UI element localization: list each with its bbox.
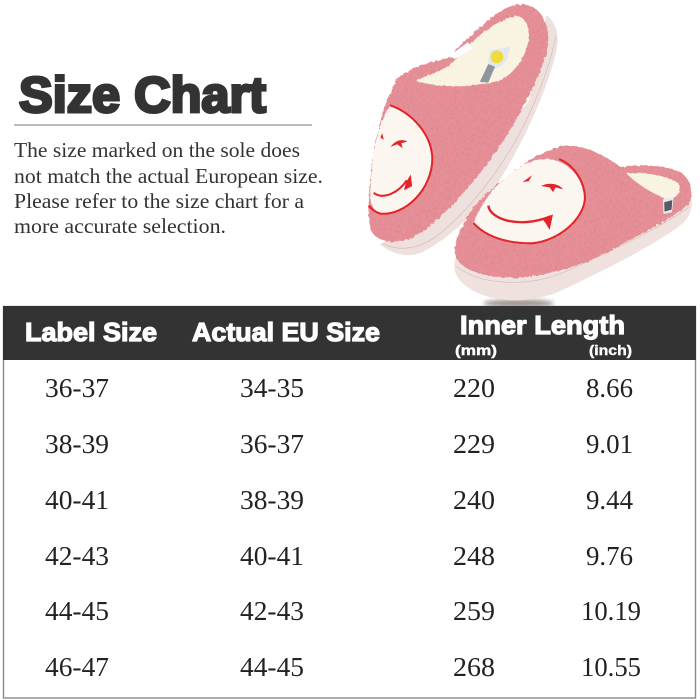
description text: not match the actual European size. (14, 164, 323, 188)
row 36-37 (45, 373, 633, 403)
row 36-37: 34-35 (240, 373, 304, 403)
row 38-39: 229 (453, 429, 495, 459)
row 40-41: 240 (453, 485, 495, 515)
row 46-47 (45, 652, 641, 682)
row 40-41: 9.44 (586, 485, 633, 515)
row 36-37: 8.66 (586, 373, 633, 403)
description text: more accurate selection. (14, 214, 226, 238)
back slipper (369, 4, 558, 255)
table header (3, 306, 696, 360)
row 46-47: 10.55 (581, 652, 641, 682)
row 44-45: 44-45 (45, 596, 109, 626)
table header: Actual EU Size (192, 317, 380, 347)
back slipper smiley (369, 105, 432, 214)
row 36-37: 36-37 (45, 373, 109, 403)
description text (14, 138, 323, 238)
row 36-37: 220 (453, 373, 495, 403)
row 38-39: 38-39 (45, 429, 109, 459)
table header: Inner Length (460, 310, 625, 340)
row 42-43: 42-43 (45, 541, 109, 571)
table frame (4, 306, 696, 698)
row 40-41: 40-41 (45, 485, 109, 515)
row 40-41 (45, 485, 633, 515)
title underline (14, 124, 312, 126)
row 38-39: 36-37 (240, 429, 304, 459)
row 42-43: 248 (453, 541, 495, 571)
row 38-39: 9.01 (586, 429, 633, 459)
ground shadow (483, 299, 554, 307)
front slipper (454, 146, 692, 300)
table header: (inch) (589, 342, 632, 358)
row 44-45: 10.19 (581, 596, 641, 626)
row 42-43: 9.76 (586, 541, 633, 571)
description text: Please refer to the size chart for a (14, 189, 304, 213)
row 40-41: 38-39 (240, 485, 304, 515)
title: Size Chart (19, 67, 266, 123)
row 44-45 (45, 596, 641, 626)
row 44-45: 42-43 (240, 596, 304, 626)
product photo: pink smiley slippers (369, 4, 692, 307)
front slipper smiley (473, 159, 585, 243)
row 46-47: 46-47 (45, 652, 109, 682)
table header: Label Size (25, 317, 157, 347)
row 44-45: 259 (453, 596, 495, 626)
row 46-47: 44-45 (240, 652, 304, 682)
row 46-47: 268 (453, 652, 495, 682)
description text: The size marked on the sole does (14, 138, 300, 162)
table header: (mm) (455, 342, 497, 358)
row 42-43 (45, 541, 633, 571)
row 38-39 (45, 429, 633, 459)
row 42-43: 40-41 (240, 541, 304, 571)
